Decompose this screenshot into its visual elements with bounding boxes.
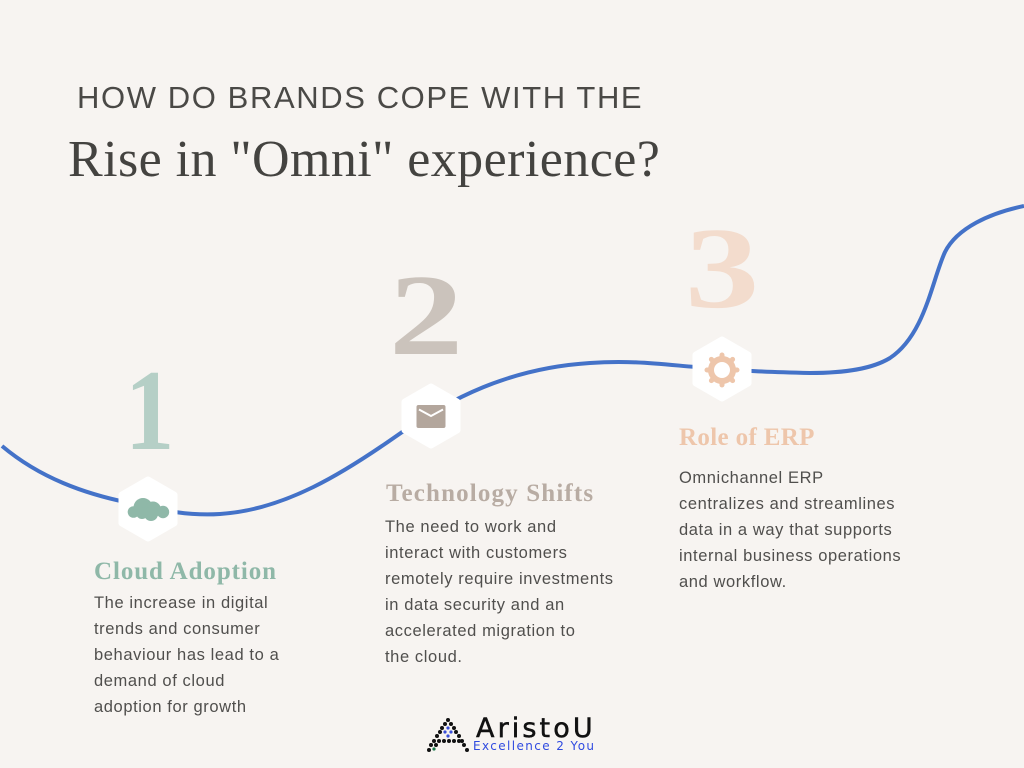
text: Technology Shifts description: the cloud.	[385, 648, 463, 666]
text: Cloud Adoption description: behaviour has lead to a	[94, 646, 279, 664]
text: Technology Shifts description: accelerated migration to	[385, 622, 576, 640]
number 2: 2	[389, 252, 463, 380]
text: Technology Shifts description: The need to work and	[385, 518, 557, 536]
text: Role of ERP description: Omnichannel ERP	[679, 469, 824, 487]
heading: Role of ERP: Role of ERP	[679, 424, 815, 451]
text: Cloud Adoption description	[94, 594, 279, 716]
title line 2: Rise in "Omni" experience?	[68, 131, 660, 188]
icon: gear in hexagon	[692, 336, 752, 402]
text: Role of ERP description: data in a way that supports	[679, 521, 892, 539]
icon: envelope in hexagon	[402, 384, 460, 448]
text: Technology Shifts description: remotely require investments	[385, 570, 614, 588]
text: Role of ERP description: and workflow.	[679, 573, 787, 591]
icon: cloud in hexagon	[118, 476, 178, 542]
number 3: 3	[685, 205, 759, 333]
text: Cloud Adoption description: trends and consumer	[94, 620, 260, 638]
title line 1: HOW DO BRANDS COPE WITH THE	[77, 80, 643, 115]
logo mark: dotted triangle	[427, 718, 469, 752]
text: Technology Shifts description: interact with customers	[385, 544, 568, 562]
text: Cloud Adoption description: demand of cloud	[94, 672, 225, 690]
text: Technology Shifts description: in data security and an	[385, 596, 565, 614]
text: Cloud Adoption description: adoption for growth	[94, 698, 247, 716]
heading: Cloud Adoption: Cloud Adoption	[94, 558, 277, 585]
heading: Technology Shifts: Technology Shifts	[386, 480, 594, 507]
logo: AristoU	[427, 713, 596, 753]
text: Technology Shifts description	[385, 518, 614, 666]
logo tagline: Excellence 2 You	[473, 739, 595, 753]
number 1: 1	[125, 347, 174, 475]
text: Role of ERP description: centralizes and streamlines	[679, 495, 895, 513]
text: Cloud Adoption description: The increase in digital	[94, 594, 268, 612]
text: Role of ERP description	[679, 469, 901, 591]
text: Role of ERP description: internal business operations	[679, 547, 901, 565]
logo wordmark: AristoU	[476, 713, 596, 744]
